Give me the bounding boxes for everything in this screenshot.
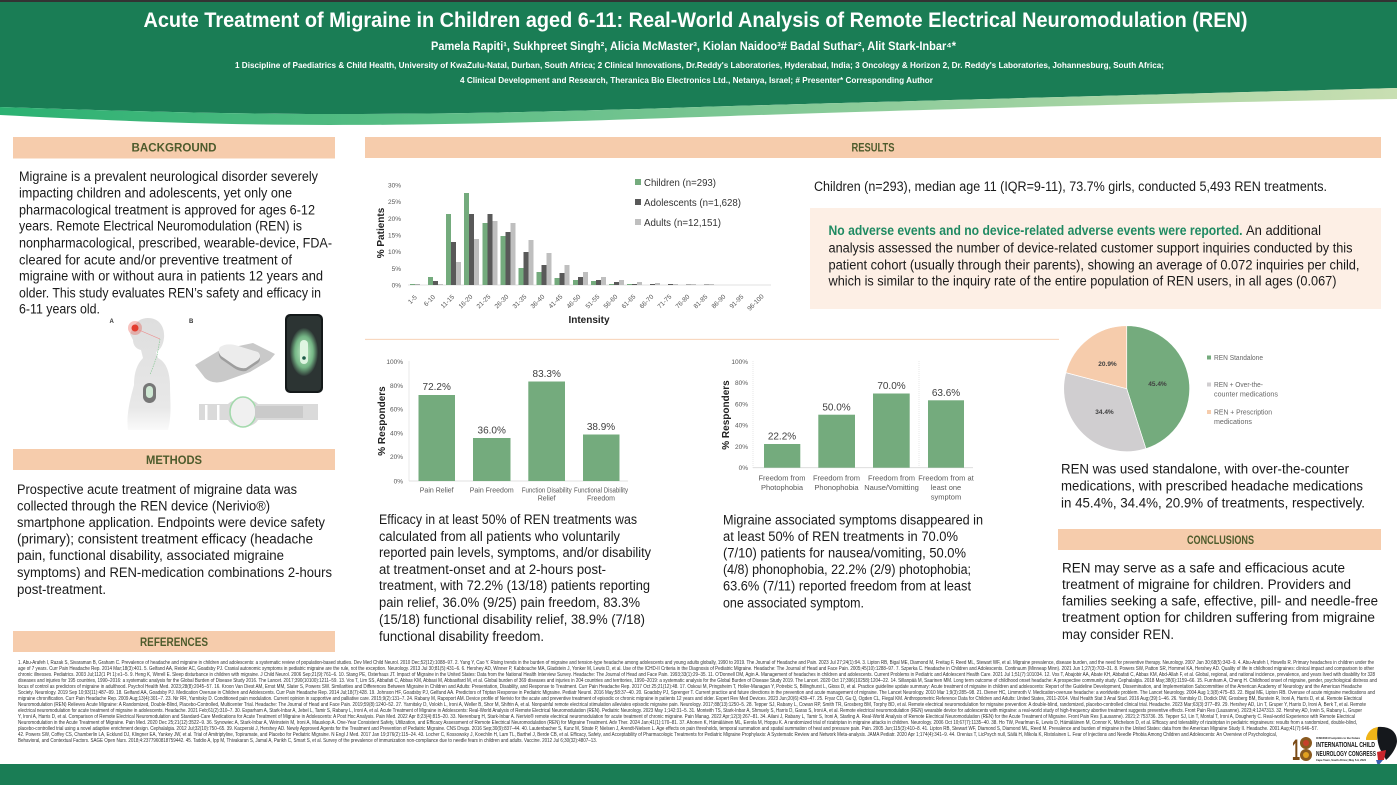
logo text: Cape Town, South Africa | May 5-9, 2024 <box>1316 758 1366 762</box>
efficacy text: Efficacy in at least 50% of REN treatments was <box>379 512 637 528</box>
pie legend <box>1207 355 1278 426</box>
reference list <box>18 660 1377 744</box>
x axis labels: 6-10 <box>423 294 437 308</box>
efficacy text: at treatment-onset and at 2-hours post- <box>379 562 606 578</box>
heading: methods: METHODS <box>146 455 202 467</box>
symptoms text <box>723 512 983 612</box>
category labels <box>420 488 628 502</box>
bar chart: associated symptoms <box>721 359 975 502</box>
value labels: 83.3% <box>533 369 561 380</box>
value labels: 50.0% <box>822 402 851 414</box>
callout: safety: analysis assessed the number of device-related customer support inquiries conducted by this <box>828 240 1352 256</box>
affiliations: 4 Clinical Development and Research, Theranica Bio Electronics Ltd., Netanya, Israel; # Presenter* Corresponding Author <box>460 75 934 85</box>
legend: Children (n=293) <box>644 177 716 189</box>
reference list: Behavioral, and Contextual Factors. SAGE Open Nurs. 2018;4:2377960818759442. 45. Taddio A, Ipp M, Thivakaran S, Jamal A, Parikh C, Smart S, et al. Survey of the prevalence of immunization non-compliance due to needle fears in children and adults. Vaccine. 2012 Jul 6;30(32):4807–13. <box>18 738 597 744</box>
combinations text <box>1061 462 1365 512</box>
background text: migraine with or without aura in patients 12 years and <box>19 269 323 285</box>
value labels <box>423 369 615 436</box>
background text: pharmacological treatment is approved for ages 6-12 <box>19 202 315 218</box>
y axis labels: 40% <box>390 430 403 438</box>
y axis labels: 15% <box>388 232 401 240</box>
title: Acute Treatment of Migraine in Children aged 6-11: Real-World Analysis of Remote Electrical Neuromodulation (REN) <box>144 9 1248 32</box>
pie legend: REN + Over-the- <box>1214 382 1264 389</box>
background text: impacting children and adolescents, yet only one <box>19 186 292 202</box>
x axis labels: 46-50 <box>566 293 583 310</box>
category labels: Freedom from at <box>918 474 975 482</box>
symptoms text: one associated symptom. <box>723 596 864 612</box>
methods text: smartphone application. Endpoints were device safety <box>17 515 326 531</box>
combinations text: in 45.4%, 34.4%, 20.9% of treatments, respectively. <box>1061 496 1365 512</box>
y axis labels: 80% <box>390 383 403 390</box>
x axis labels: 91-95 <box>729 293 746 310</box>
background text: 6-11 years old. <box>19 302 100 318</box>
pie value labels: 20.9% <box>1098 361 1117 368</box>
y axis labels: 0% <box>739 465 748 472</box>
x axis labels: 56-60 <box>603 293 620 310</box>
category labels: Pain Freedom <box>470 488 514 494</box>
x axis labels: 31-35 <box>512 293 529 310</box>
value labels <box>768 381 960 442</box>
affiliations <box>235 60 1164 85</box>
symptoms text: at least 50% of REN treatments in 70.0% <box>723 529 958 545</box>
heading: references <box>13 631 335 652</box>
value labels: 63.6% <box>932 388 960 399</box>
category labels: Functional Disability <box>574 488 628 494</box>
y axis labels: 5% <box>392 266 401 273</box>
heading: results <box>365 137 1381 158</box>
callout: safety: No adverse events and no device-related adverse events were reported. <box>828 223 1242 239</box>
efficacy text: calculated from all patients who voluntarily <box>379 529 621 545</box>
x axis labels <box>407 293 766 313</box>
methods text: symptoms) and REN-medication combinations 2-hours <box>17 565 332 581</box>
x axis labels: 11-15 <box>440 293 456 310</box>
y axis labels: 30% <box>388 182 401 190</box>
authors: Pamela Rapiti¹, Sukhpreet Singh², Alicia McMaster³, Kiolan Naidoo³# Badal Suthar², Alit Stark-Inbar⁴* <box>431 41 956 53</box>
methods text: collected through the REN device (Nerivio®) <box>17 498 270 514</box>
pie legend: REN + Prescription <box>1214 410 1272 416</box>
methods text: (primary); consistent treatment efficacy (headache <box>17 532 313 548</box>
conclusions text: treatment of migraine for children. Providers and <box>1062 577 1351 593</box>
header banner <box>0 0 1397 125</box>
reference list: 42. Powers SW, Coffey CS, Chamberlin LA, Ecklund DJ, Klingner EA, Yankey JW, et al. Trial of Amitriptyline, Topiramate, and Placebo for Pediatric Migraine. N Engl J Med. 2017 Jan 19;376(2):115–24. 43. Locher C, Kossowsky J, Koechlin H, Lam TL, Barthel J, Berde CB, et al. Efficacy, Safety, and Acceptability of Pharmacologic Treatments for Pediatric Migraine Prophylaxis: A Systematic Review and Network Meta-analysis. JAMA Pediatr. 2020 Apr 1;174(4):341–9. 44. Orenius T, LicPsych null, Säilä H, Mikola K, Ristolainen L. Fear of Injections and Needle Phobia Among Children and Adolescents: An Overview of Psychological, <box>18 732 1277 738</box>
pie slices <box>1064 326 1190 452</box>
x axis labels: 71-75 <box>657 293 674 310</box>
combinations text: REN was used standalone, with over-the-counter <box>1061 462 1349 478</box>
x axis labels: 26-30 <box>494 293 511 310</box>
heading: results: RESULTS <box>852 142 895 154</box>
category labels: symptom <box>931 492 961 502</box>
y axis labels: 80% <box>735 380 748 387</box>
symptoms text: (4/8) phonophobia, 22.2% (2/9) photophobia; <box>723 562 971 578</box>
category labels: Pain Relief <box>420 488 454 494</box>
y axis labels: 20% <box>735 444 748 451</box>
y axis labels: 25% <box>388 199 401 206</box>
bars: adolescents <box>415 214 709 285</box>
heading: references: REFERENCES <box>140 637 208 649</box>
x axis labels: 86-90 <box>711 293 728 310</box>
icon: child wearing device <box>110 318 170 430</box>
logo text <box>1316 736 1376 762</box>
callout: safety: which is similar to the inquiry rate of the entire population of REN users, in all ages (0.067) <box>828 274 1336 290</box>
heading: background: BACKGROUND <box>132 142 216 154</box>
x axis labels: 66-70 <box>639 293 656 310</box>
icon: smartphone app <box>285 314 323 393</box>
category labels: Phonophobia <box>814 483 859 492</box>
y axis labels: 0% <box>394 478 403 486</box>
category labels: Function Disability <box>522 488 572 494</box>
category labels: Nause/Vomitting <box>864 483 919 492</box>
x axis title: Intensity <box>568 315 610 326</box>
y axis labels: 60% <box>735 402 748 408</box>
icon: arm band <box>199 397 318 427</box>
conclusions text: REN may serve as a safe and efficacious acute <box>1062 560 1345 576</box>
symptoms text: (7/10) patients for nausea/vomiting, 50.0% <box>723 546 966 562</box>
footer band <box>0 764 1397 785</box>
y axis labels: 100% <box>731 359 748 366</box>
background text: nonpharmacological, prescribed, wearable-device, FDA- <box>19 236 332 252</box>
background text <box>19 169 332 318</box>
category labels <box>758 474 975 502</box>
logo map of Africa <box>1366 727 1397 766</box>
efficacy text: reported pain levels, symptoms, and/or disability <box>379 545 652 561</box>
value labels: 72.2% <box>423 382 451 393</box>
combinations text: medications, with prescribed headache medications <box>1061 478 1363 494</box>
bars <box>418 382 620 481</box>
callout: safety: An additional <box>1246 223 1321 239</box>
logo text: ICNC2024 Footprints to the Future <box>1316 736 1360 740</box>
x axis labels: 1-5 <box>407 294 419 306</box>
pie legend: medications <box>1214 419 1253 426</box>
conclusions text: may consider REN. <box>1062 627 1174 643</box>
logo: international child neurology congress: 1 <box>1292 734 1300 767</box>
y axis labels: 20% <box>388 216 401 223</box>
background text: Migraine is a prevalent neurological disorder severely <box>19 169 319 185</box>
methods text <box>17 482 332 598</box>
logo emblems <box>1300 737 1312 761</box>
background text: years. Remote Electrical Neuromodulation (REN) is <box>19 219 302 235</box>
category labels: Freedom from <box>868 474 915 482</box>
y axis labels: 0% <box>392 282 401 290</box>
value labels: 22.2% <box>768 432 796 442</box>
pie legend: REN Standalone <box>1214 355 1263 362</box>
category labels: least one <box>931 483 961 492</box>
logo: international child neurology congress <box>1292 727 1397 767</box>
x axis labels: 96-100 <box>746 293 766 313</box>
heading: background <box>13 137 335 158</box>
y axis labels <box>386 359 403 486</box>
histogram: pain intensity <box>376 177 771 326</box>
heading: methods <box>13 449 335 470</box>
category labels: Photophobia <box>761 483 804 492</box>
value labels: 38.9% <box>587 422 615 433</box>
category labels: Freedom from <box>758 474 806 482</box>
y axis title: % Patients <box>376 207 387 258</box>
category labels: Relief <box>538 496 556 502</box>
efficacy text: functional disability freedom. <box>379 629 544 645</box>
conclusions text: families seeking a safe, effective, pill- and needle-free <box>1062 594 1378 610</box>
symptoms text: 63.6% (7/11) reported freedom from at least <box>723 578 971 594</box>
pie legend: counter medications <box>1214 392 1278 398</box>
x axis labels: 16-20 <box>458 293 475 310</box>
y axis title: % Responders <box>721 380 732 450</box>
y axis labels: 60% <box>390 406 403 414</box>
y axis labels <box>731 359 748 472</box>
background text: older. This study evaluates REN’s safety and efficacy in <box>19 285 321 301</box>
efficacy text: pain relief, 36.0% (9/25) pain freedom, 83.3% <box>379 595 640 611</box>
bars <box>764 394 964 468</box>
methods text: pain, functional disability, associated migraine <box>17 548 284 564</box>
bar chart: efficacy <box>377 359 628 502</box>
x axis labels: 41-45 <box>548 293 565 310</box>
x axis labels: 76-80 <box>675 293 692 310</box>
category labels: Freedom from <box>813 474 860 482</box>
affiliations: 1 Discipline of Paediatrics & Child Health, University of KwaZulu-Natal, Durban, South Africa; 2 Clinical Innovations, Dr.Reddy's Laboratories, Hyderabad, India; 3 Oncology & Horizon 2, Dr. Reddy's Laboratories, Johannesburg, South Africa; <box>235 60 1164 70</box>
efficacy text: (15/18) functional disability relief, 38.9% (7/18) <box>379 612 645 628</box>
methods text: Prospective acute treatment of migraine data was <box>17 482 297 498</box>
pie value labels: 45.4% <box>1148 381 1167 388</box>
device illustration <box>110 314 323 430</box>
pie chart: treatment combinations <box>1064 326 1278 452</box>
methods text: post-treatment. <box>17 582 106 598</box>
icon: child wearing device: A <box>110 319 114 325</box>
legend: Adolescents (n=1,628) <box>644 197 741 209</box>
callout: safety <box>810 208 1381 309</box>
y axis labels: 40% <box>735 422 748 430</box>
panel: methods <box>13 449 335 598</box>
panel: results <box>365 137 1381 645</box>
conclusions text: treatment option for children suffering from migraine <box>1062 610 1375 626</box>
summary sentence: Children (n=293), median age 11 (IQR=9-11), 73.7% girls, conducted 5,493 REN treatments. <box>814 179 1327 195</box>
efficacy text <box>379 512 652 645</box>
x axis labels: 81-85 <box>693 293 710 310</box>
legend: Adults (n=12,151) <box>644 217 721 229</box>
icon: REN device pad: B <box>189 319 194 325</box>
y axis labels: 100% <box>386 359 403 366</box>
value labels: 70.0% <box>877 381 906 392</box>
bars: children <box>410 193 632 285</box>
heading: conclusions <box>1058 529 1381 550</box>
pie value labels <box>1095 361 1167 416</box>
efficacy text: treatment, with 72.2% (13/18) patients reporting <box>379 578 650 594</box>
conclusions text <box>1062 560 1378 643</box>
y axis labels <box>388 182 401 290</box>
legend <box>635 177 741 229</box>
panel: references <box>13 631 1377 744</box>
heading: conclusions: CONCLUSIONS <box>1187 535 1254 547</box>
y axis labels: 20% <box>390 454 403 461</box>
x axis labels: 21-25 <box>476 293 493 310</box>
background text: cleared for acute and/or preventive treatment of <box>19 252 292 268</box>
bars: adults <box>438 221 714 285</box>
panel: conclusions <box>1058 529 1381 643</box>
y axis title: % Responders <box>377 386 388 456</box>
pie value labels: 34.4% <box>1095 409 1114 416</box>
icon: REN device pad <box>189 319 275 382</box>
panel: background <box>13 137 335 430</box>
y axis labels: 10% <box>388 249 401 256</box>
symptoms text: Migraine associated symptoms disappeared in <box>723 512 983 528</box>
x axis labels: 51-55 <box>585 293 602 310</box>
x axis labels: 61-65 <box>621 293 638 310</box>
x axis labels: 36-40 <box>530 293 547 310</box>
value labels: 36.0% <box>478 426 506 436</box>
category labels: Freedom <box>587 496 615 502</box>
